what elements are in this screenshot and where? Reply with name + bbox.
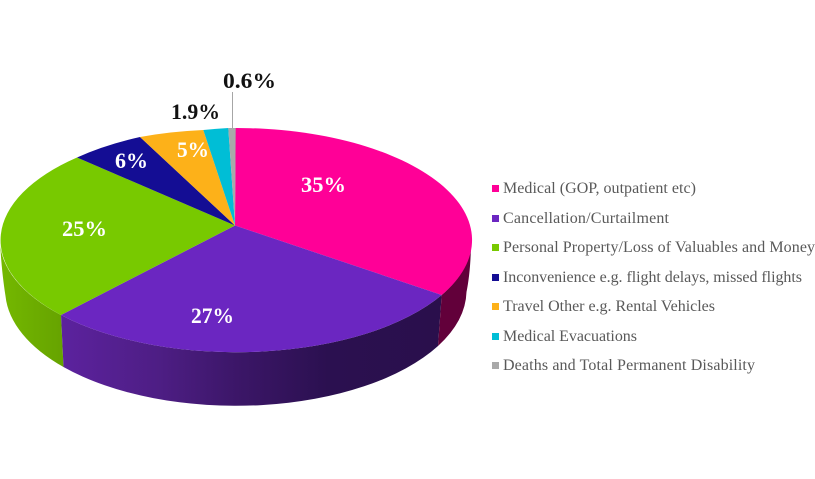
label 27%: 27% (191, 303, 234, 328)
label 5%: 5% (177, 137, 209, 162)
legend (492, 180, 815, 374)
slice: cancellation 27% (61, 226, 442, 352)
legend: cancellation: Cancellation/Curtailment (503, 210, 670, 227)
legend: personal property: Personal Property/Loss of Valuables and Money (503, 239, 815, 256)
pie side walls (0, 240, 471, 406)
slice: inconvenience 6% (77, 137, 235, 226)
slice: travel other 5% (140, 130, 235, 226)
legend: medical evacuations: Medical Evacuations (503, 328, 637, 345)
label 6%: 6% (115, 148, 148, 173)
side: personal property (0, 240, 64, 367)
legend: deaths: Deaths and Total Permanent Disability (503, 357, 755, 374)
legend: medical: Medical (GOP, outpatient etc) (503, 180, 696, 197)
slice: medical evacuations 1.9% (203, 128, 235, 226)
slice: medical 35% (235, 128, 472, 295)
label 1.9%: 1.9% (171, 99, 220, 124)
label 25%: 25% (62, 216, 107, 241)
label 35%: 35% (301, 172, 346, 197)
slice: personal property 25% (1, 158, 235, 315)
pie top face (1, 128, 472, 352)
slice: deaths 0.6% (228, 128, 236, 226)
side: medical (438, 240, 471, 346)
label 0.6%: 0.6% (223, 68, 276, 93)
side: cancellation (61, 295, 442, 406)
legend: travel other: Travel Other e.g. Rental Vehicles (503, 298, 715, 315)
leader line for 0.6% (232, 92, 234, 129)
legend: inconvenience: Inconvenience e.g. flight delays, missed flights (503, 269, 802, 286)
